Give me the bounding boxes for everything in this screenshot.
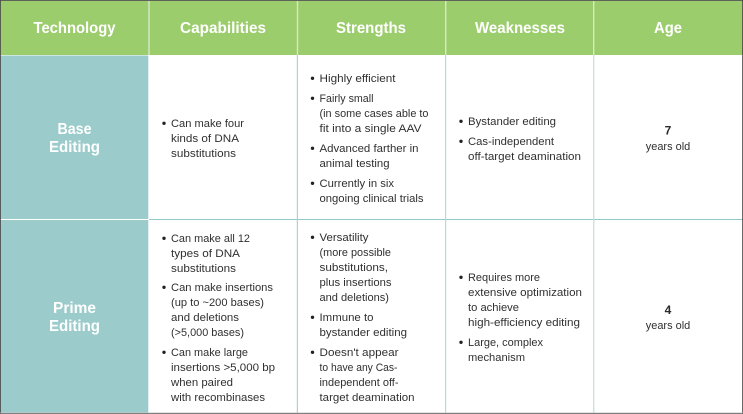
prime editing: strengths: Immune to <box>320 312 374 324</box>
prime editing: strengths: plus insertions <box>320 277 392 289</box>
base editing: strengths: Highly efficient <box>320 73 396 85</box>
prime editing: age <box>646 303 690 332</box>
technology column: Base <box>58 121 92 138</box>
technology column: Editing <box>49 318 100 335</box>
prime editing: weaknesses: mechanism <box>468 352 525 364</box>
base editing: weaknesses: Cas-independent <box>468 136 555 148</box>
technology column: Prime <box>53 300 96 317</box>
header row: Capabilities <box>180 20 266 37</box>
prime editing: weaknesses: Requires more <box>468 272 540 284</box>
header row: Weaknesses <box>475 20 565 37</box>
grid lines <box>149 55 743 413</box>
prime editing: capabilities: insertions >5,000 bp <box>171 362 275 374</box>
prime editing: capabilities: types of DNA <box>171 248 240 260</box>
prime editing: age: 4 <box>665 303 672 317</box>
technology column <box>0 56 148 412</box>
technology column: Editing <box>49 139 100 156</box>
prime editing: weaknesses: Large, complex <box>468 337 543 349</box>
prime editing: weaknesses: high-efficiency editing <box>468 317 580 329</box>
base editing: age <box>646 124 690 153</box>
header row <box>0 1 743 55</box>
prime editing: strengths: and deletions) <box>320 292 389 304</box>
base editing: weaknesses <box>459 116 581 163</box>
prime editing: strengths: target deamination <box>320 392 414 404</box>
header row: Age <box>654 20 682 37</box>
prime editing: weaknesses <box>459 272 582 364</box>
prime editing: capabilities: (>5,000 bases) <box>171 327 244 339</box>
base editing: strengths: (in some cases able to <box>320 108 428 120</box>
prime editing: strengths: to have any Cas- <box>320 362 398 374</box>
prime editing: strengths: Versatility <box>320 232 369 244</box>
prime editing: weaknesses: to achieve <box>468 302 519 314</box>
base editing: capabilities: kinds of DNA <box>171 133 239 145</box>
prime editing: strengths: bystander editing <box>320 327 407 339</box>
base editing: strengths: fit into a single AAV <box>320 123 422 135</box>
prime editing: capabilities <box>162 233 275 404</box>
prime editing: strengths: Doesn't appear <box>320 347 399 359</box>
prime editing: capabilities: when paired <box>170 377 233 389</box>
prime editing: strengths: (more possible <box>320 247 391 259</box>
prime editing: strengths: independent off- <box>320 377 399 389</box>
base editing: capabilities: Can make four <box>171 118 244 130</box>
base editing: strengths: Advanced farther in <box>320 143 418 155</box>
header row: Technology <box>34 20 116 37</box>
base editing: age: years old <box>646 141 690 153</box>
base editing: weaknesses: Bystander editing <box>468 116 556 128</box>
base editing: capabilities <box>162 118 244 160</box>
base editing: strengths: Fairly small <box>320 93 374 105</box>
prime editing: age: years old <box>646 320 690 332</box>
prime editing: capabilities: Can make large <box>171 347 248 359</box>
prime editing: capabilities: Can make all 12 <box>171 233 250 245</box>
base editing: strengths: Currently in six <box>320 178 394 190</box>
prime editing: capabilities: and deletions <box>171 312 239 324</box>
base editing: strengths: ongoing clinical trials <box>320 193 424 205</box>
prime editing: capabilities: (up to ~200 bases) <box>171 297 264 309</box>
prime editing: capabilities: with recombinases <box>170 392 265 404</box>
prime editing: strengths <box>311 232 414 404</box>
base editing: weaknesses: off-target deamination <box>468 151 581 163</box>
base editing: age: 7 <box>665 124 672 138</box>
base editing: capabilities: substitutions <box>171 148 236 160</box>
base editing: strengths: animal testing <box>320 158 390 170</box>
prime editing: capabilities: Can make insertions <box>171 282 273 294</box>
prime editing: strengths: substitutions, <box>320 262 388 274</box>
prime editing: weaknesses: extensive optimization <box>468 287 582 299</box>
prime editing: capabilities: substitutions <box>171 263 236 275</box>
header row: Strengths <box>336 20 406 37</box>
base editing: strengths <box>311 73 428 205</box>
